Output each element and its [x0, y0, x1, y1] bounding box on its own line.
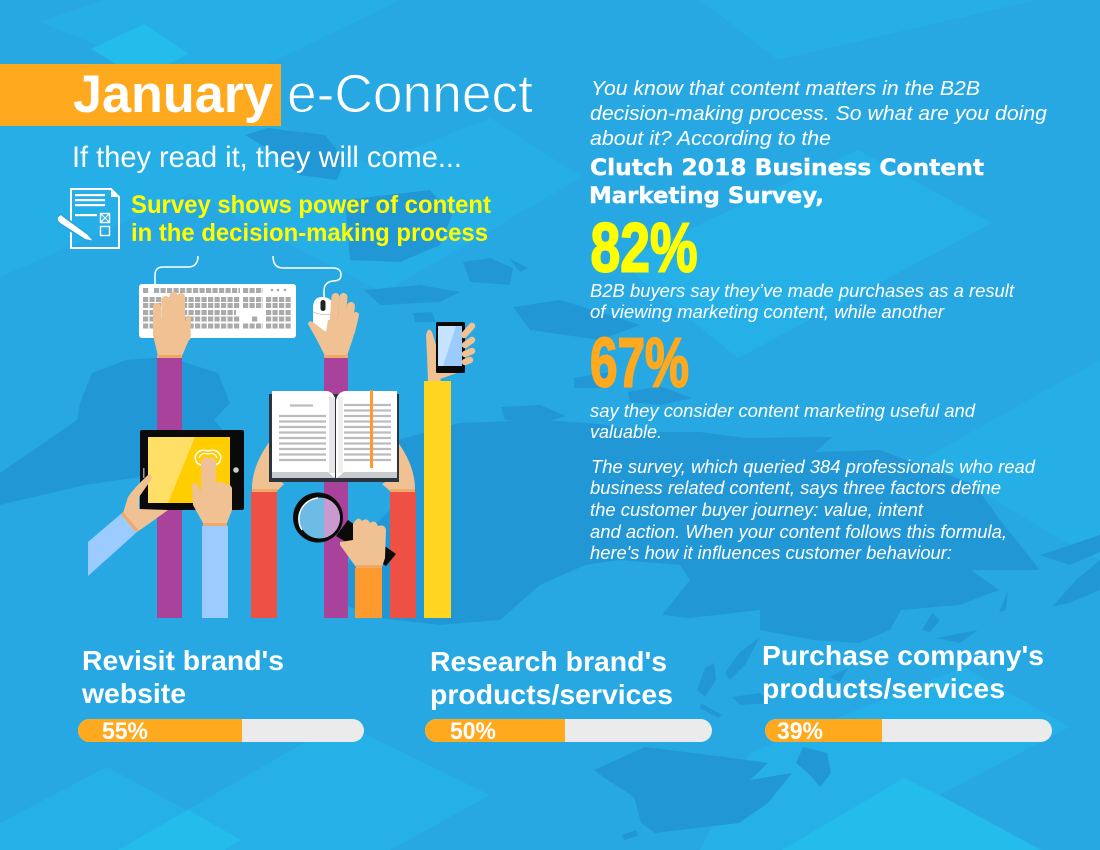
- survey name: [589, 156, 985, 209]
- arms: [157, 358, 182, 618]
- hand holding phone: [426, 330, 457, 381]
- phone fingers: [464, 326, 472, 362]
- metric: purchase products: Purchase company's: [762, 640, 1044, 671]
- tablet: [140, 430, 244, 510]
- survey paragraph: [590, 456, 1036, 563]
- survey heading: Survey shows power of content: [131, 191, 492, 219]
- open book: [269, 390, 399, 482]
- keyboard: [139, 284, 296, 338]
- stat text: useful: say they consider content marketing useful and: [590, 400, 976, 421]
- stat text: useful: valuable.: [590, 421, 662, 442]
- metric: revisit website: website: [81, 678, 186, 709]
- survey paragraph: the customer buyer journey: value, intent: [590, 499, 924, 520]
- survey paragraph: here's how it influences customer behaviour:: [590, 542, 952, 563]
- hand on keyboard: [153, 296, 191, 358]
- metric: research products: products/services: [430, 679, 673, 710]
- metric: revisit website: [78, 645, 364, 745]
- survey paragraph: The survey, which queried 384 professionals who read: [591, 456, 1036, 477]
- hand tapping tablet: [192, 457, 232, 526]
- hand holding magnifier: [340, 519, 386, 568]
- book hands: [252, 437, 415, 492]
- stat: 82%: 82%: [590, 208, 698, 286]
- intro paragraph: decision-making process. So what are you doing: [590, 103, 1047, 125]
- title banner: [0, 64, 533, 126]
- illustration: hands and devices: [88, 256, 472, 618]
- metric: research products: 50%: [450, 718, 496, 745]
- survey name: Marketing Survey,: [589, 184, 824, 209]
- metric: purchase products: [762, 640, 1052, 745]
- metric: revisit website: 55%: [102, 718, 148, 745]
- stat text: purchases: of viewing marketing content, while another: [590, 301, 945, 322]
- metric: research products: [425, 646, 712, 745]
- hand on mouse: [308, 297, 357, 358]
- intro paragraph: You know that content matters in the B2B: [591, 78, 980, 100]
- survey paragraph: business related content, says three factors define: [590, 477, 1001, 498]
- magnifying glass: [293, 492, 396, 566]
- mouse: [313, 297, 333, 332]
- survey paragraph: and action. When your content follows this formula,: [590, 521, 1007, 542]
- icon: survey form and pencil: [57, 189, 119, 248]
- stat text: purchases: [590, 280, 1015, 322]
- metric: revisit website: Revisit brand's: [82, 645, 284, 676]
- title banner: e-Connect: [287, 64, 533, 124]
- title banner: January: [73, 65, 274, 124]
- subtitle: If they read it, they will come...: [72, 141, 462, 174]
- survey heading: [131, 191, 492, 247]
- hand holding tablet: [123, 475, 168, 532]
- survey heading: in the decision-making process: [131, 219, 488, 247]
- stat text: purchases: B2B buyers say they’ve made purchases as a result: [590, 280, 1015, 301]
- phone: [436, 322, 465, 373]
- survey name: Clutch 2018 Business Content: [590, 156, 985, 181]
- metric: purchase products: products/services: [762, 673, 1005, 704]
- intro paragraph: [590, 78, 1047, 150]
- stat: 67%: 67%: [590, 324, 689, 402]
- intro paragraph: about it? According to the: [590, 128, 831, 150]
- device cables: [155, 256, 341, 298]
- stat text: useful: [590, 400, 976, 442]
- metric: research products: Research brand's: [430, 646, 667, 677]
- metric: purchase products: 39%: [777, 718, 823, 745]
